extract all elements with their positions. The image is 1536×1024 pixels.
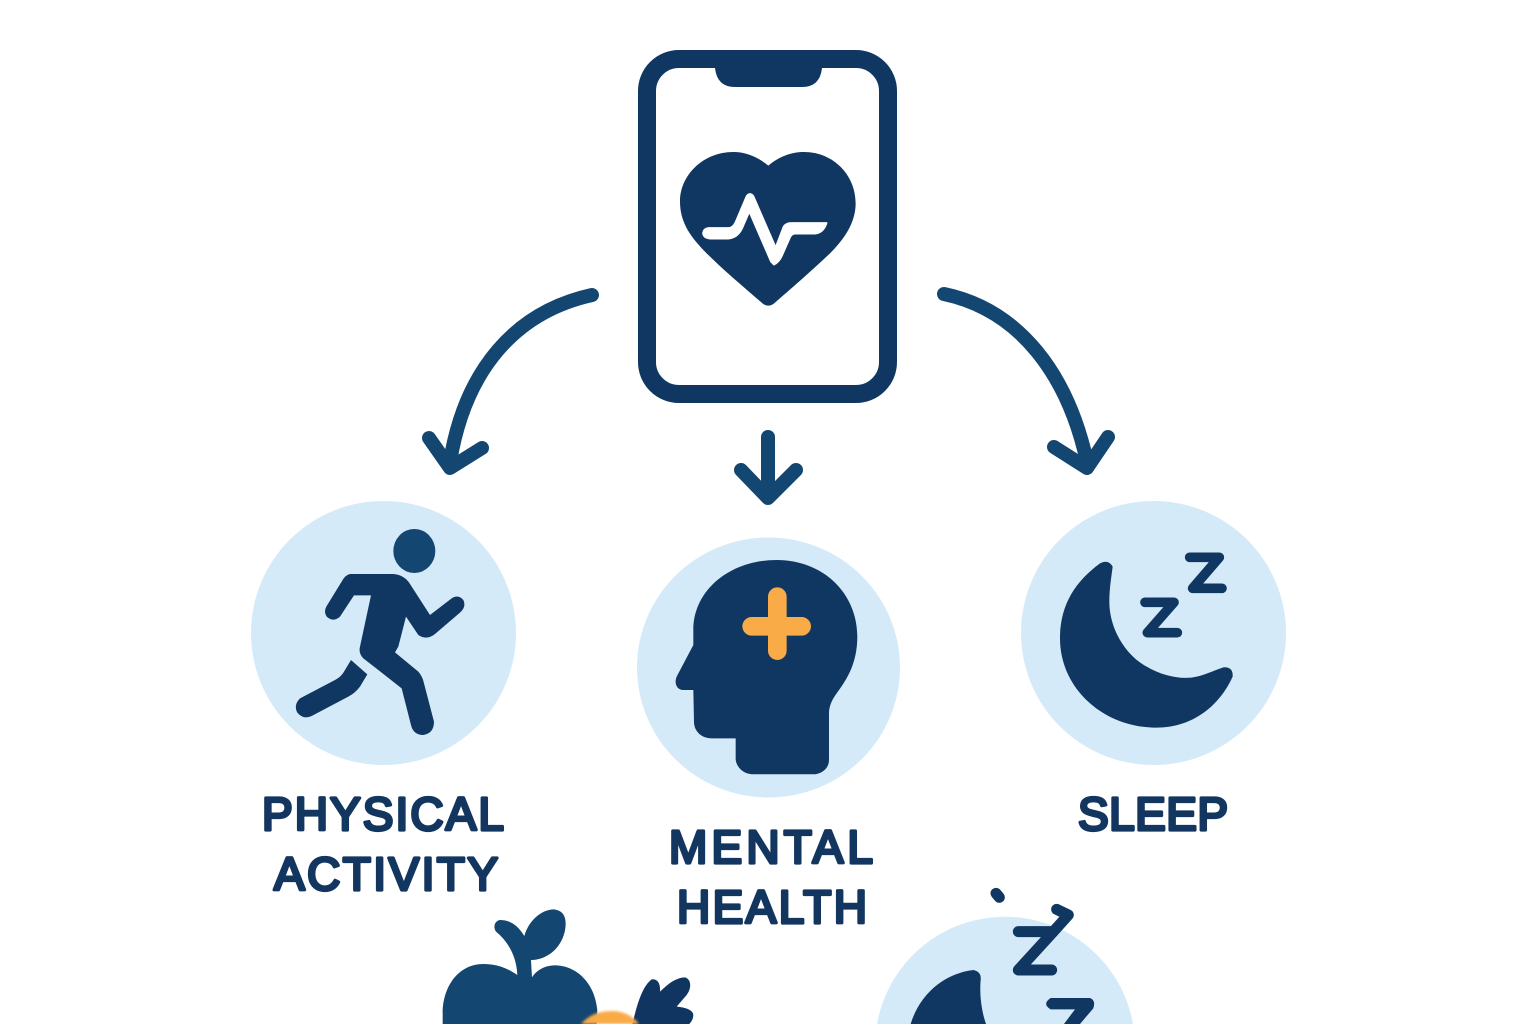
icon: head with plus xyxy=(676,560,857,774)
arrow: to physical activity xyxy=(429,295,592,468)
icon: crescent moon with z's xyxy=(1060,557,1233,728)
orange xyxy=(581,1011,639,1024)
panel: sleep, cropped lower icon xyxy=(877,893,1133,1024)
icon: apple with carrot xyxy=(443,909,693,1024)
panel: mental health xyxy=(637,538,900,933)
label: mental health xyxy=(669,821,873,933)
icon: runner xyxy=(296,529,464,735)
label: physical activity: ACTIVITY xyxy=(274,848,498,900)
panel: physical activity xyxy=(251,501,516,900)
arrow: to mental health xyxy=(741,437,796,498)
icon: moon and z's xyxy=(911,893,1094,1024)
phone notch xyxy=(715,62,822,87)
label: sleep: SLEEP xyxy=(1078,788,1228,840)
icon: heart with pulse xyxy=(680,152,856,306)
label: mental health: MENTAL xyxy=(669,821,873,873)
panel: sleep xyxy=(1021,501,1286,840)
carrot leaves xyxy=(632,977,693,1024)
label: mental health: HEALTH xyxy=(677,881,867,933)
label: physical activity xyxy=(262,788,504,900)
label: physical activity: PHYSICAL xyxy=(262,788,504,840)
icon: smartphone with heart xyxy=(647,59,888,394)
arrow: to sleep xyxy=(944,294,1108,468)
apple xyxy=(443,909,597,1024)
